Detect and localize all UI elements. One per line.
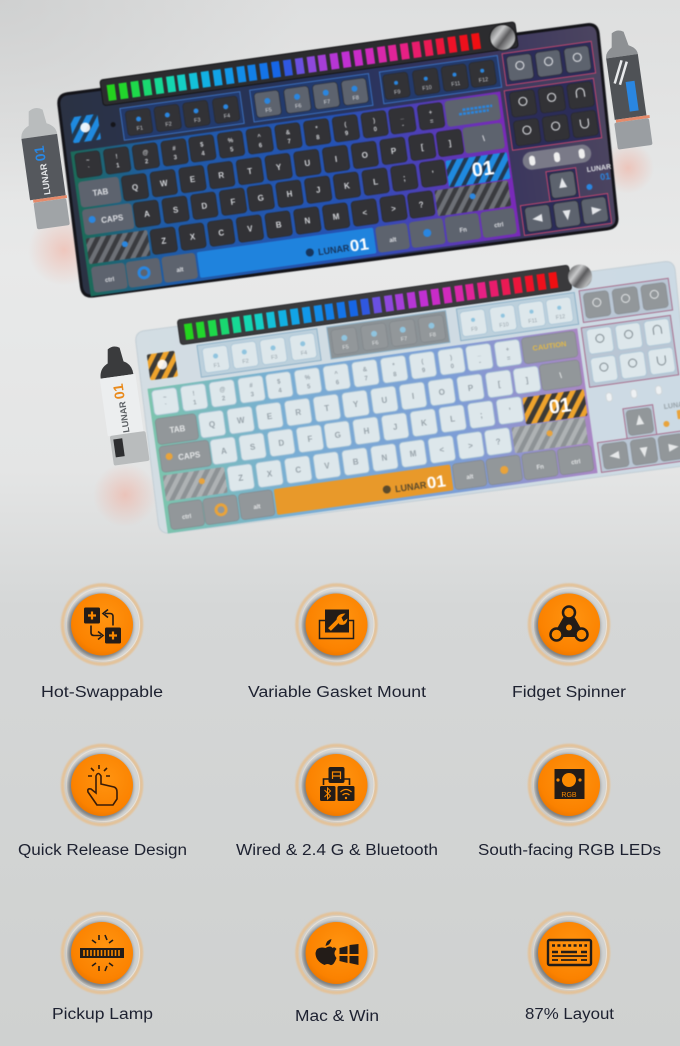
- badge: [62, 914, 142, 992]
- dark ZXCV row: X: [189, 232, 196, 242]
- dark QWERTY row: TAB: [92, 187, 109, 198]
- light number row: 3: [250, 392, 255, 398]
- feature: Variable Gasket Mount: [297, 585, 376, 664]
- dark escape logo key: [70, 111, 117, 143]
- light number row: `: [165, 404, 168, 411]
- rocket body: [21, 134, 66, 200]
- light function row: F7: [401, 336, 408, 343]
- light function key plate: [197, 292, 579, 377]
- dark number row: $: [200, 142, 205, 149]
- light QWERTY row: P: [467, 383, 474, 393]
- dark number row: `: [88, 167, 91, 174]
- light ASDF row: ': [509, 406, 512, 416]
- dark bottom row: alt: [176, 267, 184, 274]
- light function row: F4: [301, 350, 308, 357]
- light bottom row: Fn: [536, 464, 545, 471]
- dark LED bar: [100, 22, 518, 106]
- light arrow keys: [597, 404, 680, 469]
- dark function row: F10: [422, 85, 432, 92]
- light QWERTY row: O: [438, 388, 446, 397]
- light ASDF row: H: [363, 426, 370, 436]
- dark QWERTY row: \: [482, 134, 486, 143]
- dark number row: !: [115, 154, 118, 161]
- dark QWERTY row: E: [189, 175, 196, 184]
- rocket label: LUNAR 01: [31, 145, 53, 196]
- light bottom row: LUNAR: [394, 480, 428, 494]
- light ZXCV row: >: [468, 441, 474, 451]
- light bottom row: 01: [426, 471, 447, 493]
- label: 87% Layout: [525, 1006, 615, 1023]
- dark function row: F2: [165, 121, 172, 128]
- rocket cap: [97, 344, 133, 379]
- dark QWERTY row: W: [159, 179, 169, 189]
- rocket base band: [113, 438, 125, 457]
- dark ZXCV row: [86, 179, 511, 265]
- dark QWERTY row: P: [390, 146, 397, 156]
- light QWERTY row: [155, 360, 582, 445]
- light function row: F11: [528, 318, 538, 325]
- dark number row: +: [428, 110, 433, 117]
- light ZXCV row: ?: [495, 437, 501, 447]
- dark function row: F6: [295, 103, 302, 110]
- rocket base: [33, 198, 70, 230]
- light bottom row: alt: [253, 504, 261, 511]
- dark ASDF row: S: [172, 205, 180, 215]
- light number row: *: [392, 363, 396, 369]
- dark function row: F4: [224, 113, 231, 120]
- light ASDF row: F: [307, 434, 313, 444]
- light number row: @: [219, 387, 226, 394]
- dark QWERTY row: U: [304, 159, 311, 168]
- feature: Quick Release Design: [62, 746, 142, 824]
- dark function row: F11: [451, 81, 461, 88]
- dark QWERTY row: [: [420, 143, 425, 152]
- dark QWERTY row: I: [334, 155, 338, 164]
- dark QWERTY row: [78, 123, 505, 208]
- icon: RGB LED: RGB: [561, 792, 577, 799]
- light number row: =: [507, 356, 512, 362]
- light number row: 6: [335, 380, 340, 387]
- light QWERTY row: W: [236, 416, 246, 426]
- dark ZXCV row: B: [275, 220, 282, 230]
- label: Wired & 2.4 G & Bluetooth: [236, 842, 438, 859]
- light number row: +: [505, 347, 510, 354]
- feature: Wired, 2.4G, Bluetooth: [297, 746, 376, 824]
- light logo on case: [661, 401, 680, 427]
- feature: Mac & Win: [297, 914, 376, 992]
- badge: [297, 746, 376, 824]
- label: Variable Gasket Mount: [248, 684, 427, 701]
- badge: [530, 585, 608, 664]
- dark ASDF row: [82, 150, 511, 239]
- left rocket module: light: [96, 344, 150, 466]
- dark number row: 2: [145, 159, 149, 166]
- light number row: 1: [193, 400, 198, 407]
- light number row: #: [249, 383, 254, 390]
- dark function row: F3: [194, 117, 201, 124]
- dark ZXCV row: ?: [418, 200, 424, 210]
- dark function row: F7: [324, 99, 331, 106]
- icon: lamp bar: [80, 935, 124, 971]
- light nav cluster: [581, 282, 678, 383]
- dark number row: #: [172, 146, 177, 153]
- light number row: ): [450, 355, 453, 361]
- light QWERTY row: [: [497, 380, 502, 389]
- light QWERTY row: U: [381, 396, 388, 405]
- dark logo on case: [584, 164, 614, 190]
- light function row: F5: [342, 344, 349, 351]
- light QWERTY row: Y: [352, 400, 360, 409]
- light function row: F12: [555, 314, 566, 321]
- light ASDF row: CAPS: [178, 450, 202, 462]
- light keyboard: [131, 250, 680, 539]
- dark ZXCV row: N: [304, 216, 311, 226]
- feature: Pickup Lamp: [62, 914, 142, 992]
- dark logo on case: LUNAR: [586, 164, 612, 174]
- label: Pickup Lamp: [52, 1006, 153, 1023]
- light function row: F6: [372, 340, 379, 347]
- dark number row: 4: [201, 151, 206, 158]
- light ZXCV row: B: [352, 457, 359, 467]
- right rocket module: dark: [602, 28, 654, 150]
- light number row: 4: [278, 388, 283, 395]
- dark QWERTY row: O: [361, 151, 369, 160]
- icon: swap: [84, 608, 121, 644]
- dark case: [54, 19, 625, 302]
- light ASDF row: L: [450, 414, 456, 424]
- dark ZXCV row: >: [391, 204, 397, 214]
- light QWERTY row: TAB: [169, 424, 186, 435]
- light QWERTY row: R: [295, 408, 302, 417]
- dark ZXCV row: <: [362, 208, 368, 218]
- light number row: 0: [450, 364, 455, 370]
- dark ASDF row: J: [315, 185, 321, 195]
- dark number row: -: [402, 123, 405, 129]
- badge: [297, 585, 376, 664]
- dark number row: 9: [345, 131, 349, 137]
- dark function row: F9: [394, 89, 401, 96]
- light LED bar: [177, 265, 572, 345]
- dark ASDF row: ;: [402, 173, 406, 183]
- dark function row: F8: [352, 95, 359, 102]
- badge: [62, 585, 142, 664]
- dark function row: F5: [265, 107, 272, 114]
- rocket cap: [603, 28, 638, 58]
- light ASDF row: D: [278, 438, 285, 448]
- dark arrow keys: [520, 167, 609, 232]
- dark ZXCV row: Z: [161, 236, 167, 246]
- dark number row: 1: [116, 163, 121, 170]
- dark ASDF row: CAPS: [101, 213, 125, 225]
- dark number row: 8: [316, 135, 321, 141]
- icon: spinner: [550, 606, 588, 640]
- dark ASDF row: ': [432, 169, 435, 179]
- rocket base: [614, 118, 653, 150]
- red glow: dark keyboard right: [602, 142, 654, 194]
- dark QWERTY row: Q: [131, 183, 139, 193]
- dark key plate: [70, 91, 521, 296]
- light ASDF row: S: [249, 442, 257, 452]
- dark number row: *: [315, 126, 319, 132]
- light ASDF row: K: [420, 418, 428, 428]
- dark ASDF row: H: [286, 189, 293, 199]
- feature: Hot-Swappable: [62, 585, 142, 664]
- light function row: F2: [242, 358, 249, 365]
- dark ASDF row: G: [257, 193, 265, 203]
- icon: keyboard: [548, 940, 591, 965]
- dark ASDF row: D: [201, 201, 208, 211]
- light ZXCV row: [163, 416, 588, 502]
- light QWERTY row: I: [411, 392, 415, 401]
- light QWERTY row: Q: [208, 420, 216, 430]
- light knob: [567, 263, 594, 290]
- light function row: F1: [213, 363, 221, 369]
- light number row: 8: [393, 372, 398, 378]
- rocket blue panel: [626, 81, 639, 112]
- background shade: [0, 0, 300, 200]
- label: Mac & Win: [295, 1008, 379, 1025]
- dark ASDF row: K: [343, 181, 351, 191]
- light nav plates: [576, 278, 680, 472]
- dark logo on case: 01: [599, 171, 611, 182]
- dark number row: 7: [287, 139, 292, 145]
- dark number row: 5: [230, 147, 235, 154]
- light ZXCV row: Z: [238, 473, 244, 483]
- dark function row: F1: [136, 126, 144, 132]
- light QWERTY row: ]: [525, 376, 529, 385]
- light QWERTY row: E: [266, 412, 273, 421]
- light escape logo key: [147, 351, 178, 380]
- feature: Fidget Spinner: [530, 585, 608, 664]
- dark ZXCV row: C: [218, 228, 225, 238]
- dark ASDF row: F: [230, 197, 236, 207]
- light ASDF row: ;: [479, 410, 483, 420]
- dark knob: [488, 23, 517, 52]
- rocket slashes: [612, 60, 630, 85]
- light ZXCV row: C: [295, 465, 302, 475]
- light number row: &: [362, 367, 368, 374]
- light QWERTY row: \: [559, 371, 563, 380]
- light indicator dots: [606, 385, 662, 402]
- rocket orange ring: [33, 195, 67, 203]
- light ASDF row: 01: [547, 394, 573, 419]
- light ZXCV row: M: [409, 449, 417, 459]
- light ASDF row: [159, 387, 588, 476]
- dark bottom row: ctrl: [105, 277, 115, 284]
- dark number row: =: [430, 119, 435, 125]
- badge: [530, 746, 608, 824]
- dark QWERTY row: ]: [448, 139, 452, 148]
- dark number row: 0: [373, 127, 378, 133]
- rocket label: LUNAR 01: [110, 382, 132, 434]
- dark ZXCV row: V: [247, 224, 254, 234]
- label: Quick Release Design: [18, 842, 187, 859]
- dark number row: [74, 94, 501, 179]
- dark function row: [125, 60, 497, 136]
- icon: pressing hand: [88, 765, 117, 805]
- dark function row: F12: [478, 77, 489, 84]
- light number row: 7: [364, 376, 369, 382]
- icon: connections: [320, 767, 354, 801]
- light ASDF row: G: [334, 430, 342, 440]
- dark ZXCV row: M: [332, 212, 340, 222]
- light ZXCV row: X: [266, 469, 273, 479]
- dark number row: ): [373, 118, 376, 124]
- dark ASDF row: L: [373, 177, 379, 187]
- dark number row: %: [228, 138, 234, 145]
- rocket body: [100, 374, 143, 436]
- light number row: 9: [422, 368, 426, 374]
- light number row: [151, 331, 578, 416]
- badge: [297, 914, 376, 992]
- dark number row: 3: [173, 155, 178, 161]
- rocket cap: [17, 106, 57, 139]
- label: Hot-Swappable: [41, 684, 163, 701]
- light bottom row: [168, 445, 594, 530]
- dark ASDF row: A: [143, 209, 151, 219]
- dark number row: 6: [258, 143, 263, 150]
- light number row: !: [192, 391, 195, 398]
- light ASDF row: J: [392, 422, 398, 432]
- feature: 87% Layout: [530, 914, 608, 992]
- dark bottom row: [91, 208, 517, 293]
- badge: [62, 746, 142, 824]
- light ZXCV row: V: [324, 461, 331, 471]
- dark bottom row: LUNAR: [317, 243, 351, 257]
- left rocket module: dark: [17, 105, 71, 230]
- light ZXCV row: <: [439, 445, 445, 455]
- light function row: F8: [429, 332, 436, 339]
- dark number row: (: [344, 122, 347, 128]
- light ZXCV row: N: [381, 453, 388, 463]
- dark number row: _: [399, 114, 405, 121]
- icon: apple and windows: [316, 939, 358, 965]
- label: Fidget Spinner: [512, 684, 626, 701]
- light ASDF row: A: [220, 446, 228, 456]
- label: South-facing RGB LEDs: [478, 842, 661, 859]
- dark indicator pill: [522, 143, 592, 171]
- rocket body: [606, 54, 646, 120]
- rocket orange ring: [616, 115, 650, 123]
- dark bottom row: alt: [389, 237, 397, 244]
- dark nav cluster: [504, 45, 601, 146]
- icon: wrench tray: [320, 610, 354, 638]
- light function row: [202, 297, 574, 373]
- light number row: ^: [334, 371, 339, 378]
- light number row: -: [479, 360, 482, 366]
- light number row: 2: [222, 396, 226, 403]
- dark bottom row: 01: [349, 234, 370, 256]
- dark number row: @: [142, 150, 149, 157]
- light function row: F9: [471, 326, 478, 333]
- dark function key plate: [120, 55, 502, 140]
- light bottom row: ctrl: [182, 514, 192, 521]
- light key plate: [147, 328, 598, 533]
- light number row: ~: [163, 395, 168, 402]
- light function row: F10: [499, 322, 509, 329]
- light bottom row: alt: [466, 474, 474, 481]
- light number row: CAUTION: [532, 339, 567, 353]
- rocket base: [110, 431, 150, 466]
- light bottom row: ctrl: [571, 459, 581, 467]
- light number row: $: [277, 379, 282, 386]
- dark number row: ~: [86, 158, 91, 165]
- feature: South-facing RGB LEDs: [530, 746, 608, 824]
- light case: [131, 256, 680, 539]
- light number row: (: [421, 359, 424, 365]
- dark keyboard: [53, 10, 625, 302]
- dark bottom row: Fn: [459, 227, 468, 234]
- light function row: F3: [271, 354, 278, 361]
- badge: [530, 914, 608, 992]
- dark QWERTY row: Y: [275, 163, 283, 172]
- light number row: %: [305, 375, 311, 382]
- red glow: light keyboard left: [93, 463, 157, 527]
- dark ASDF row: 01: [470, 157, 496, 182]
- red glow: dark keyboard left: [28, 214, 100, 286]
- light number row: _: [476, 351, 482, 358]
- dark nav plates: [499, 41, 617, 235]
- light number row: 5: [307, 384, 312, 391]
- dark number row: &: [285, 130, 291, 137]
- light QWERTY row: T: [324, 404, 330, 413]
- dark bottom row: ctrl: [494, 222, 504, 230]
- dark QWERTY row: T: [247, 167, 253, 176]
- dark number row: ^: [257, 134, 262, 141]
- dark QWERTY row: R: [218, 171, 225, 180]
